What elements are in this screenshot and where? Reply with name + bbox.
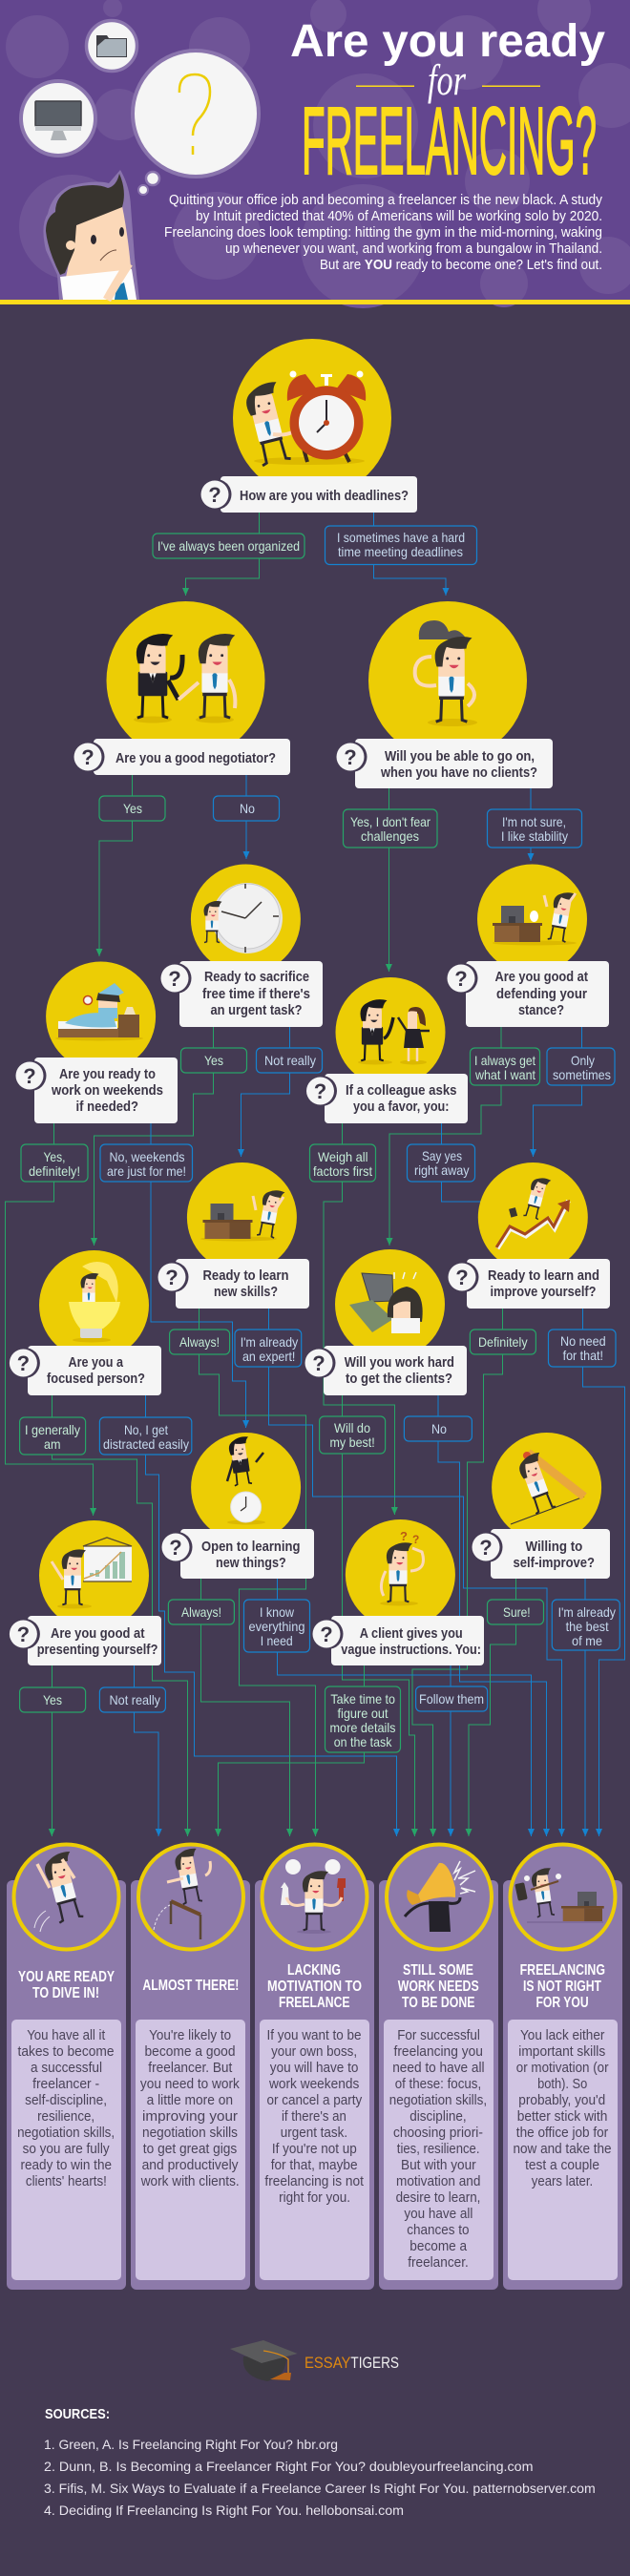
question: open to learning: new things? <box>216 1555 286 1571</box>
result: lacking motivation: LACKING <box>287 1962 341 1979</box>
flowchart connectors <box>6 513 624 1836</box>
question: learn and improve: Ready to learn and <box>488 1267 599 1284</box>
result text: you need to work <box>140 2077 241 2092</box>
intro paragraph: up whenever you want, and working from a bungalow in Thailand. <box>225 241 602 257</box>
arrow: willing best <box>584 1579 586 1836</box>
question: negotiator <box>74 601 290 775</box>
sources: 3. Fifis, M. Six Ways to Evaluate if a Freelance Career Is Right For You. patternobserver.com <box>44 2481 596 2496</box>
result text: the office job for <box>516 2126 608 2141</box>
result text: work with clients. <box>140 2174 240 2189</box>
illustration: man on rising graph <box>496 1175 570 1248</box>
result text: desire to learn, <box>396 2190 480 2206</box>
logo: EssayTigers: ESSAY <box>304 2354 350 2372</box>
result: still some work: WORK NEEDS <box>398 1979 479 1995</box>
question: work hard: to get the clients? <box>346 1371 452 1387</box>
answer: defend sometimes: sometimes <box>553 1067 611 1082</box>
result text: negotiation skills, <box>17 2126 115 2141</box>
question: vague instructions: vague instructions. You: <box>341 1642 481 1658</box>
answer: client details <box>325 1686 401 1752</box>
answer: presenting yes <box>20 1687 86 1712</box>
answer: willing best: of me <box>572 1633 602 1648</box>
result text: a little more on <box>147 2093 233 2108</box>
question: work hard: Will you work hard <box>345 1354 454 1371</box>
arrow: hard time <box>374 513 446 596</box>
arrow: weigh factors <box>324 1123 394 1515</box>
result: freelancing not for you: FOR YOU <box>536 1995 589 2011</box>
answer: improve no need: No need <box>560 1333 606 1349</box>
result text: to get great gigs <box>143 2142 237 2157</box>
answer: negotiator yes <box>99 796 165 821</box>
result text: or cancel a party <box>267 2093 363 2108</box>
answer: weekends no <box>100 1144 193 1182</box>
result text: If you want to be <box>267 2028 361 2043</box>
result: ready to dive in <box>7 1844 126 2290</box>
question: open to learning <box>162 1433 314 1579</box>
answer: say yes <box>407 1144 475 1182</box>
question: new skills: new skills? <box>214 1284 278 1300</box>
answer: willing sure <box>487 1600 544 1624</box>
illustration: man in light bulb <box>69 1262 120 1342</box>
arrow: defend yes <box>389 1027 501 1246</box>
answer: defend always: what I want <box>474 1067 536 1082</box>
answer: focused yes: am <box>44 1436 61 1452</box>
question: presenting: presenting yourself? <box>37 1642 158 1658</box>
answer: weekends yes <box>21 1144 88 1182</box>
result text: freelancer. <box>408 2255 469 2271</box>
question: deadlines: ? <box>208 483 221 507</box>
question: presenting <box>10 1520 161 1665</box>
result: lacking motivation <box>255 1844 374 2290</box>
arrow: presenting no <box>135 1665 158 1836</box>
answer: skills expert <box>235 1330 302 1367</box>
arrow: client follow <box>450 1665 452 1836</box>
arrow: client details <box>218 1665 365 1836</box>
result text: You lack either <box>520 2028 605 2043</box>
question: go on with no clients <box>336 601 553 788</box>
result text <box>140 2028 241 2189</box>
question: vague instructions <box>313 1519 484 1665</box>
arrow: defend sometimes <box>533 1027 582 1157</box>
illustration: man with megaphone <box>405 1861 475 1932</box>
result text: so you are fully <box>23 2142 110 2157</box>
illustration: man smashing desk <box>514 1868 604 1923</box>
arrow: stability <box>530 788 532 861</box>
sources: 4. Deciding If Freelancing Is Right For You. hellobonsai.com <box>44 2503 404 2518</box>
sources: 2. Dunn, B. Is Becoming a Freelancer Right For You? doubleyourfreelancing.com <box>44 2459 533 2474</box>
arrow: focused yes <box>52 1395 187 1836</box>
result text: takes to become <box>17 2044 115 2060</box>
result text: right for you. <box>279 2190 350 2206</box>
answer: open know everything: I need <box>261 1633 293 1648</box>
arrow: open always <box>200 1579 290 1836</box>
character: thinking man <box>43 170 139 300</box>
answer: presenting yes: Yes <box>43 1692 62 1707</box>
answer: no fear <box>344 809 437 848</box>
result text: clients' hearts! <box>26 2174 107 2189</box>
intro paragraph: by Intuit predicted that 40% of Americans will be working solo by 2020. <box>196 208 602 224</box>
result text <box>264 2028 364 2206</box>
result text: choosing priori- <box>393 2126 483 2141</box>
question: weekends: Are you ready to <box>59 1066 156 1082</box>
answer: client follow <box>416 1686 488 1711</box>
arrow: skills expert <box>269 1309 561 1836</box>
illustration: jumping man <box>34 1851 87 1932</box>
result: still some work <box>379 1844 498 2290</box>
sources: SOURCES: <box>45 2407 110 2422</box>
illustration: handshake <box>134 634 235 723</box>
answer: weigh factors: Weigh all <box>318 1149 368 1164</box>
answer: hard time <box>325 526 477 565</box>
answer: weekends no: are just for me! <box>107 1163 186 1179</box>
result text: both). So <box>537 2077 587 2092</box>
arrow: weekends yes <box>6 1123 94 1516</box>
answer: weekends yes: Yes, <box>44 1149 65 1164</box>
answer: stability: I like stability <box>501 828 568 844</box>
answer: organized <box>153 534 304 558</box>
result text: become a good <box>145 2044 235 2060</box>
answer: improve definitely: Definitely <box>478 1334 528 1350</box>
arrow: open know everything <box>277 1579 531 1836</box>
answer: open know everything: everything <box>248 1619 305 1634</box>
illustration: puzzled man: ? <box>400 1529 408 1543</box>
question: weekends <box>15 962 178 1123</box>
question: work hard <box>305 1249 467 1395</box>
arrow: sacrifice yes <box>94 1027 214 1246</box>
illustration: man presenting chart <box>52 1538 132 1609</box>
answer: weigh factors: factors first <box>313 1163 372 1179</box>
answer: negotiator yes: Yes <box>123 801 142 816</box>
result text: become a <box>410 2239 468 2254</box>
answer: client details: more details <box>330 1720 395 1735</box>
result text <box>17 2028 115 2189</box>
answer: improve definitely <box>470 1330 536 1354</box>
result text: But with your <box>401 2158 476 2173</box>
question: work hard: ? <box>312 1351 326 1375</box>
thought bubble: question mark <box>133 51 259 177</box>
arrow: weekends no <box>151 1123 246 1428</box>
arrow: sacrifice no <box>241 1027 290 1157</box>
result text: resilience, <box>37 2109 94 2125</box>
answer: stability: I'm not sure, <box>502 814 566 829</box>
result text: You have all it <box>27 2028 105 2043</box>
result text: freelancer. But <box>148 2061 232 2076</box>
intro paragraph: But are YOU ready to become one? Let's find out. <box>320 257 602 273</box>
answer: say yes: right away <box>414 1162 470 1178</box>
header panel <box>0 0 630 308</box>
question: weekends: work on weekends <box>51 1082 163 1099</box>
result text: ties, resilience. <box>397 2142 479 2157</box>
title: for <box>428 55 467 104</box>
arrow: organized <box>185 513 260 596</box>
answer: open know everything <box>244 1600 309 1652</box>
answer: defend sometimes <box>547 1048 615 1085</box>
result: almost there <box>131 1844 250 2290</box>
illustration: man jumping hurdle <box>154 1848 210 1939</box>
illustration: cheering man at desk <box>200 1188 285 1241</box>
question: sacrifice free time: Ready to sacrifice <box>204 969 309 985</box>
result text <box>514 2028 612 2189</box>
result text: improving your <box>142 2109 238 2125</box>
answer: work hard no: No <box>431 1421 447 1436</box>
result: almost there: ALMOST THERE! <box>142 1978 239 1994</box>
logo: EssayTigers: TIGERS <box>350 2354 399 2372</box>
answer: presenting no: Not really <box>109 1692 160 1707</box>
answer: focused no <box>99 1417 192 1455</box>
question: new skills: ? <box>165 1266 178 1289</box>
arrow: improve no need <box>582 1309 624 1836</box>
answer: stability <box>487 809 582 848</box>
result: freelancing not for you <box>503 1844 622 2290</box>
answer: client details: figure out <box>338 1706 388 1721</box>
illustration: man with angel and devil <box>281 1859 346 1934</box>
result text: urgent task. <box>281 2126 347 2141</box>
title: Are you ready <box>290 16 605 67</box>
answer: weekends no: No, weekends <box>109 1149 185 1164</box>
question: weekends: ? <box>23 1064 36 1088</box>
question: deadlines: How are you with deadlines? <box>240 488 409 504</box>
result text: test a couple <box>525 2158 599 2173</box>
result text: your own boss, <box>271 2044 357 2060</box>
answer: focused no: No, I get <box>124 1422 168 1437</box>
result text: better stick with <box>517 2109 607 2125</box>
arrow: no fear <box>388 788 389 972</box>
answer: open always: Always! <box>181 1604 221 1620</box>
illustration: puzzled man: ? <box>412 1533 419 1546</box>
result: ready to dive in: YOU ARE READY <box>18 1969 115 1985</box>
result: lacking motivation: MOTIVATION TO <box>267 1979 362 1995</box>
result text: freelancer - <box>32 2077 99 2092</box>
question: vague instructions: A client gives you <box>360 1625 463 1642</box>
illustration: puzzled man <box>380 1529 424 1605</box>
answer: client details: Take time to <box>330 1691 395 1707</box>
arrow: skills always <box>199 1309 315 1836</box>
result text: If you're not up <box>272 2142 357 2157</box>
result text: negotiation skills <box>142 2126 238 2141</box>
question: defending stance: defending your <box>496 986 587 1002</box>
result: still some work: TO BE DONE <box>402 1995 475 2011</box>
question: presenting: ? <box>17 1623 30 1646</box>
arrow: negotiator no <box>245 775 247 859</box>
answer: negotiator no: No <box>240 801 255 816</box>
question: new skills <box>158 1162 309 1309</box>
question: go on with no clients: when you have no clients? <box>380 764 537 781</box>
result text: work weekends <box>268 2077 359 2092</box>
question: defending stance: Are you good at <box>494 969 588 985</box>
result text: motivation and <box>396 2174 480 2189</box>
question: focused <box>10 1250 161 1395</box>
arrow: presenting yes <box>51 1665 52 1836</box>
answer: sacrifice no <box>256 1048 323 1073</box>
thought bubble: monitor icon <box>21 81 95 156</box>
question: sacrifice free time: an urgent task? <box>210 1002 302 1018</box>
result: still some work: STILL SOME <box>403 1962 473 1979</box>
answer: no fear: Yes, I don't fear <box>350 814 430 829</box>
result text: if there's an <box>282 2109 346 2125</box>
arrow: work hard yes <box>343 1395 414 1836</box>
question: defending stance: stance? <box>518 1002 564 1018</box>
result text <box>389 2028 487 2271</box>
question: open to learning: Open to learning <box>201 1539 300 1555</box>
answer: organized: I've always been organized <box>158 538 300 554</box>
answer: improve no need: for that! <box>563 1348 603 1363</box>
result text: you will have to <box>270 2061 358 2076</box>
answer: focused yes: I generally <box>25 1422 80 1437</box>
answer: work hard no <box>404 1416 472 1441</box>
question: colleague favor <box>306 977 468 1123</box>
answer: client follow: Follow them <box>419 1691 484 1707</box>
answer: work hard yes <box>320 1416 386 1454</box>
answer: open know everything: I know <box>260 1604 295 1620</box>
answer: willing best <box>552 1600 620 1650</box>
question: sacrifice free time: ? <box>168 967 181 991</box>
arrow: improve definitely <box>412 1309 502 1836</box>
result text: You're likely to <box>149 2028 231 2043</box>
question: learn and improve: improve yourself? <box>491 1284 596 1300</box>
result text: freelancing you <box>393 2044 483 2060</box>
question: self-improve: ? <box>479 1536 493 1560</box>
answer: presenting no <box>99 1687 165 1712</box>
question: negotiator: ? <box>81 745 94 769</box>
answer: willing best: the best <box>566 1619 609 1634</box>
answer: skills always: Always! <box>179 1334 220 1350</box>
question: go on with no clients: ? <box>344 745 357 769</box>
result text: freelancing is not <box>264 2174 364 2189</box>
illustration: man and alarm clock <box>242 370 366 466</box>
result text: important skills <box>518 2044 605 2060</box>
question: open to learning: ? <box>169 1536 182 1560</box>
question: colleague favor: you a favor, you: <box>353 1099 449 1115</box>
logo: EssayTigers <box>230 2340 399 2381</box>
result text: of these: focus, <box>395 2077 481 2092</box>
question: vague instructions: ? <box>320 1623 333 1646</box>
question: self-improve: Willing to <box>525 1539 582 1555</box>
arrow: willing sure <box>469 1579 515 1836</box>
result text: now and take the <box>514 2142 612 2157</box>
answer: sacrifice yes: Yes <box>204 1053 223 1068</box>
answer: skills expert: I'm already <box>241 1334 298 1350</box>
question: colleague favor: If a colleague asks <box>346 1082 456 1099</box>
sources <box>44 2407 596 2518</box>
sources: 1. Green, A. Is Freelancing Right For You? hbr.org <box>44 2437 338 2452</box>
result text: chances to <box>407 2223 470 2238</box>
illustration: man hanging on clock <box>204 883 283 953</box>
answer: improve no need <box>548 1330 616 1367</box>
result: lacking motivation: FREELANCE <box>279 1995 350 2011</box>
answer: defend always <box>470 1048 540 1085</box>
result: ready to dive in: TO DIVE IN! <box>32 1985 99 2001</box>
title <box>290 16 605 195</box>
result text: self-discipline, <box>25 2093 107 2108</box>
answer: willing sure: Sure! <box>503 1604 531 1620</box>
result: freelancing not for you: IS NOT RIGHT <box>523 1979 601 1995</box>
result text: or motivation (or <box>516 2061 609 2076</box>
illustration: man carrying pencil <box>511 1452 584 1524</box>
question: go on with no clients: Will you be able to go on, <box>385 748 535 764</box>
answer: sacrifice no: Not really <box>264 1053 316 1068</box>
question: weekends: if needed? <box>76 1099 138 1115</box>
result text: discipline, <box>410 2109 467 2125</box>
answer: say yes: Say yes <box>422 1148 462 1163</box>
arrow: work hard no <box>438 1395 546 1836</box>
result text: negotiation skills, <box>389 2093 487 2108</box>
question: sacrifice free time: free time if there's <box>202 986 310 1002</box>
answer: sacrifice yes <box>181 1048 246 1073</box>
arrow: focused no <box>145 1395 396 1836</box>
arrow: negotiator yes <box>99 775 132 956</box>
question: focused: ? <box>17 1351 30 1375</box>
result text: a successful <box>31 2061 102 2076</box>
answer: open always <box>168 1600 234 1624</box>
illustration: man in bed <box>55 983 143 1040</box>
question: self-improve: self-improve? <box>514 1555 595 1571</box>
answer: hard time: I sometimes have a hard <box>337 530 465 545</box>
question: deadlines <box>200 339 417 513</box>
intro paragraph <box>164 192 602 273</box>
arrow: say yes <box>441 1123 533 1202</box>
intro paragraph: Freelancing does look tempting: hitting the gym in the mid-morning, waking <box>164 224 602 241</box>
illustration: man balancing on clock <box>227 1436 265 1525</box>
answer: weigh factors <box>309 1144 376 1182</box>
answer: skills expert: an expert! <box>242 1349 295 1364</box>
answer: negotiator no <box>214 796 279 821</box>
result text: you have all <box>404 2207 472 2222</box>
illustration: worried man under cloud <box>415 620 477 726</box>
question: defending stance <box>447 865 609 1027</box>
illustration: desk and money <box>493 890 577 945</box>
result text: probably, you'd <box>518 2093 605 2108</box>
answer: client details: on the task <box>334 1734 392 1749</box>
question: defending stance: ? <box>454 967 468 991</box>
answer: focused no: distracted easily <box>103 1436 189 1452</box>
question: colleague favor: ? <box>314 1079 326 1103</box>
answer: defend sometimes: Only <box>571 1053 595 1068</box>
question: negotiator: Are you a good negotiator? <box>116 750 276 766</box>
answer labels <box>20 526 620 1752</box>
result: freelancing not for you: FREELANCING <box>520 1962 605 1979</box>
result text: For successful <box>397 2028 480 2043</box>
answer: willing best: I'm already <box>558 1604 616 1620</box>
answer: work hard yes: Will do <box>334 1420 370 1435</box>
answer: work hard yes: my best! <box>330 1435 375 1450</box>
question: learn and improve: ? <box>455 1266 469 1289</box>
answer: focused yes <box>20 1417 86 1455</box>
result text: ready to win the <box>21 2158 112 2173</box>
small thought bubbles <box>138 172 159 195</box>
thought bubble: folder icon <box>86 21 137 71</box>
answer: defend always: I always get <box>474 1053 536 1068</box>
question: sacrifice free time <box>160 865 323 1027</box>
question: new skills: Ready to learn <box>202 1267 288 1284</box>
question: focused: Are you a <box>69 1354 124 1371</box>
illustration: frustrated worker at laptop <box>349 1272 423 1333</box>
answer: skills always <box>170 1330 230 1354</box>
result text: for that, maybe <box>271 2158 358 2173</box>
answer: hard time: time meeting deadlines <box>338 544 463 559</box>
illustration: two colleagues <box>358 999 430 1065</box>
answer: weekends yes: definitely! <box>29 1163 80 1179</box>
result text: need to have all <box>392 2061 485 2076</box>
answer: no fear: challenges <box>361 828 419 844</box>
question: presenting: Are you good at <box>51 1625 145 1642</box>
question: self-improve <box>472 1433 610 1579</box>
question: focused: focused person? <box>47 1371 145 1387</box>
result text: and productively <box>142 2158 239 2173</box>
result text: years later. <box>532 2174 593 2189</box>
question: learn and improve <box>449 1162 610 1309</box>
